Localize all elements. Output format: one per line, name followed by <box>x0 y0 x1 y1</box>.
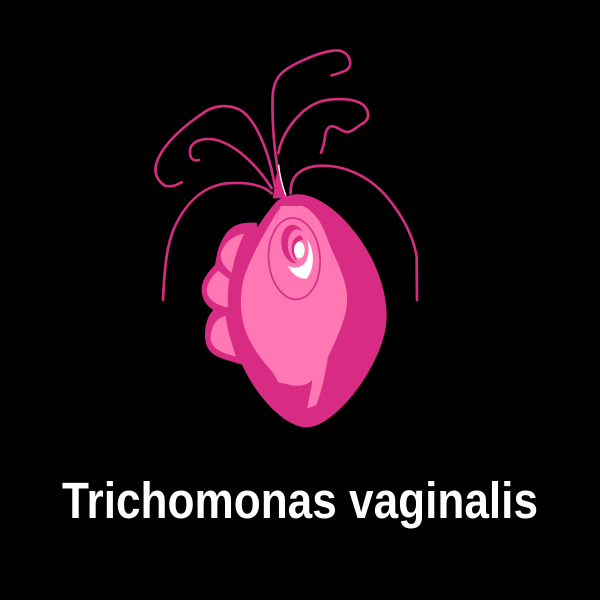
nucleus <box>266 216 323 301</box>
cytoplasm highlight <box>241 206 347 408</box>
cell body <box>228 194 387 427</box>
organism <box>202 194 387 427</box>
icon: lobed undulating membrane <box>202 223 267 366</box>
flagella <box>155 50 417 300</box>
title: Trichomonas vaginalis <box>62 472 538 529</box>
